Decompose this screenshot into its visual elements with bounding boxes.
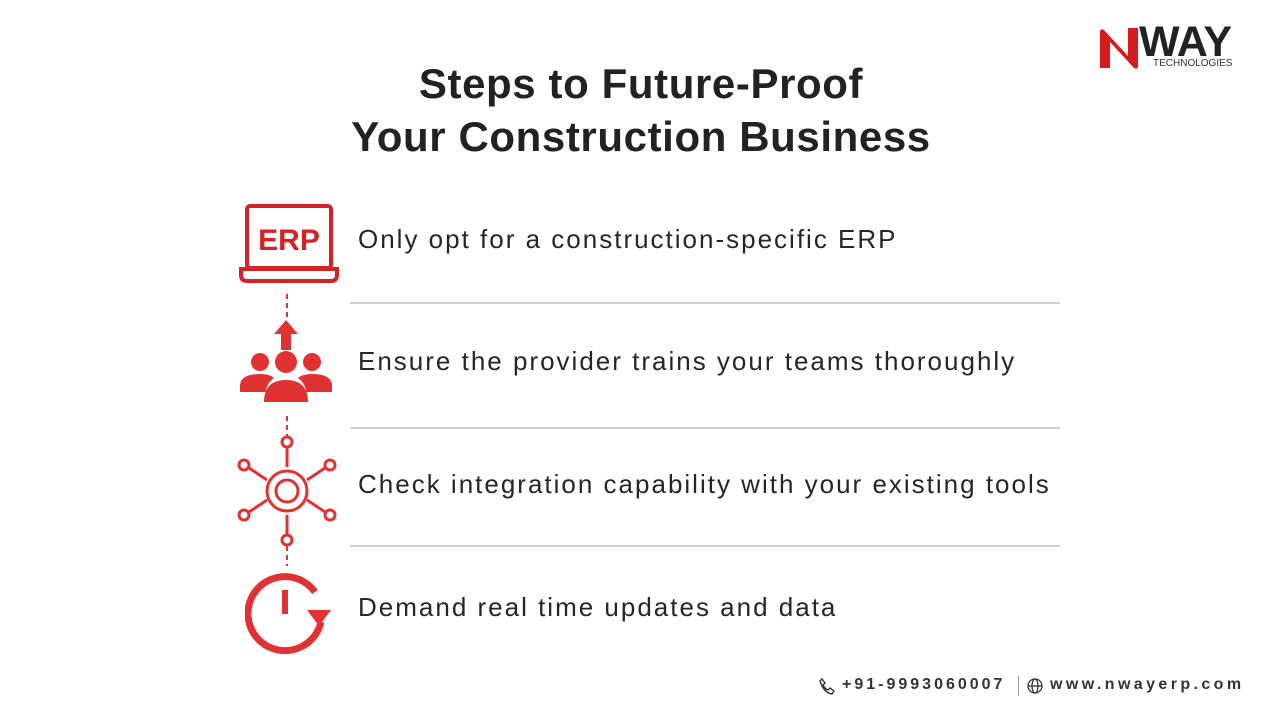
icon: gear integration <box>238 436 336 546</box>
connectors <box>286 294 288 566</box>
step 1: Only opt for a construction-specific ERP <box>358 224 898 254</box>
logo <box>1100 18 1232 69</box>
step 2: Ensure the provider trains your teams thoroughly <box>358 346 1016 376</box>
icon: clock refresh <box>245 573 331 654</box>
logo: TECHNOLOGIES <box>1153 58 1232 69</box>
step 4: Demand real time updates and data <box>358 592 837 622</box>
footer contact: +91-9993060007 <box>842 676 1005 693</box>
icon: ERP laptop: ERP <box>258 224 320 257</box>
logo: WAY <box>1139 18 1232 66</box>
footer contact <box>819 676 1244 696</box>
icon: ERP laptop <box>239 204 339 283</box>
title: Steps to Future-Proof <box>419 60 863 107</box>
title <box>351 60 931 160</box>
title: Your Construction Business <box>351 113 931 160</box>
step 3: Check integration capability with your existing tools <box>358 469 1051 499</box>
icon: team up arrow <box>240 320 332 402</box>
footer contact: www.nwayerp.com <box>1050 676 1244 693</box>
